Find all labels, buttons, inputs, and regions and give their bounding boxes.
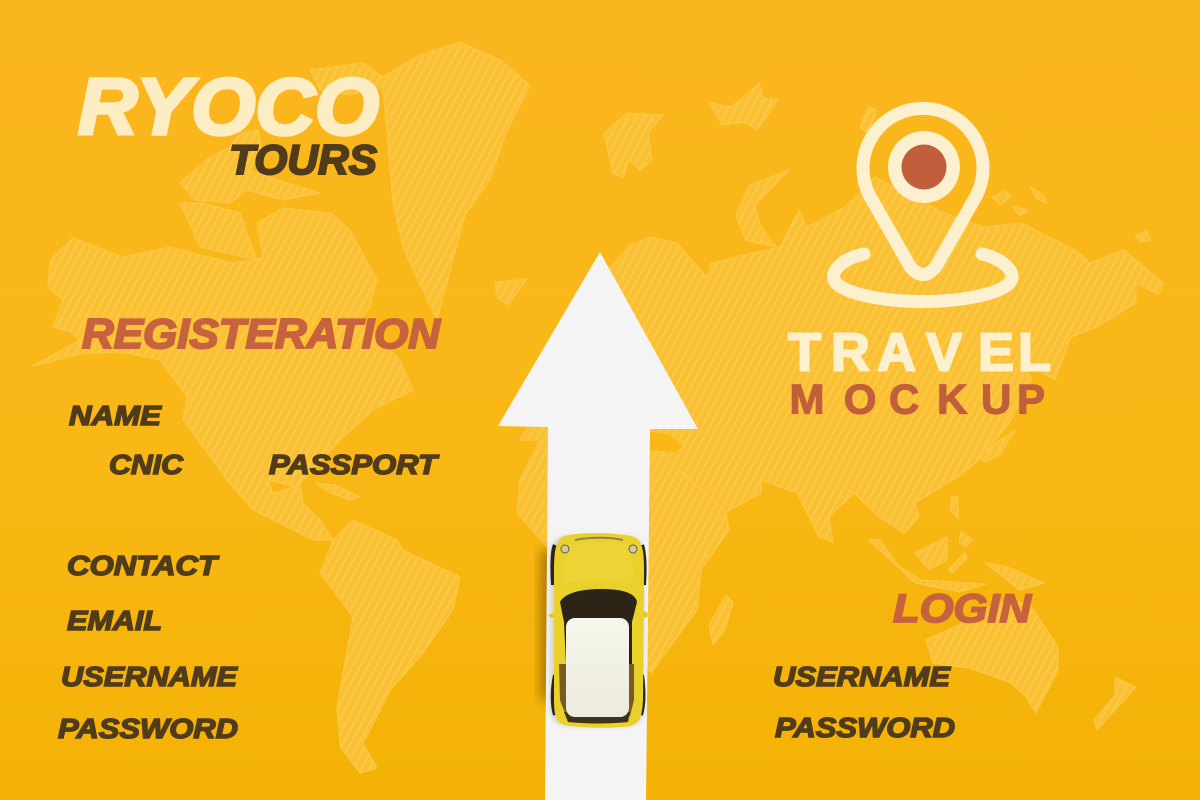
map: madagascar	[709, 595, 733, 645]
subtitle: tours: TOURS	[229, 136, 377, 183]
pin centre ring	[888, 131, 960, 203]
map: eurasia	[520, 177, 1163, 542]
logo word: travel: TRAVEL	[788, 322, 1051, 382]
car hood highlight	[563, 542, 633, 584]
logo word: mockup: MOCKUP	[790, 376, 1045, 422]
map: south america	[320, 520, 460, 773]
car tyres	[552, 545, 645, 715]
field label: email: EMAIL	[67, 605, 162, 636]
pin centre dot	[902, 144, 946, 190]
map: cuba	[315, 483, 360, 500]
toy car	[548, 533, 648, 728]
car grille	[575, 538, 623, 540]
map: africa	[517, 440, 729, 673]
field label: name: NAME	[69, 400, 162, 431]
icon: location pin	[834, 108, 1012, 302]
field label: passport: PASSPORT	[269, 449, 440, 480]
right headlight	[629, 545, 637, 553]
white road arrow	[498, 252, 698, 800]
car mirrors	[548, 611, 648, 618]
map: arctic small islands	[860, 107, 1151, 242]
map: greenland	[310, 42, 530, 320]
title: ryoco: RYOCO	[78, 62, 379, 151]
map: svalbard	[709, 83, 778, 130]
car headlights	[561, 545, 637, 553]
car shadow	[541, 550, 555, 700]
car rear strip	[564, 712, 630, 724]
field label: password: PASSWORD	[58, 713, 238, 744]
map: novaya zemlya	[736, 170, 789, 247]
car windscreen	[560, 589, 637, 664]
map: iceland and britain	[604, 113, 663, 178]
map: arctic islands	[180, 130, 320, 260]
heading: login: LOGIN	[893, 587, 1032, 631]
heading: registeration: REGISTERATION	[82, 310, 442, 357]
car rear windows	[559, 664, 634, 722]
map: australia	[926, 603, 1058, 713]
map: southeast asia islands	[915, 497, 972, 573]
car shadow on road	[550, 536, 644, 726]
pin base ellipse	[834, 254, 1012, 302]
login field: username: USERNAME	[773, 661, 951, 692]
car white roof	[566, 618, 629, 717]
map: japan	[979, 430, 1015, 462]
map: north and central america	[33, 208, 413, 540]
login field: password: PASSWORD	[775, 712, 955, 743]
field label: username: USERNAME	[61, 661, 238, 692]
map: sumatra java	[869, 540, 986, 592]
map: mediterranean sea	[645, 431, 683, 452]
field label: cnic: CNIC	[109, 449, 184, 480]
field label: contact: CONTACT	[67, 550, 220, 581]
pin outline	[863, 108, 983, 274]
map: new guinea	[985, 563, 1044, 590]
map: small north atlantic island	[495, 279, 527, 305]
map: new zealand	[1094, 677, 1136, 730]
left headlight	[561, 545, 569, 553]
car body	[554, 533, 644, 728]
